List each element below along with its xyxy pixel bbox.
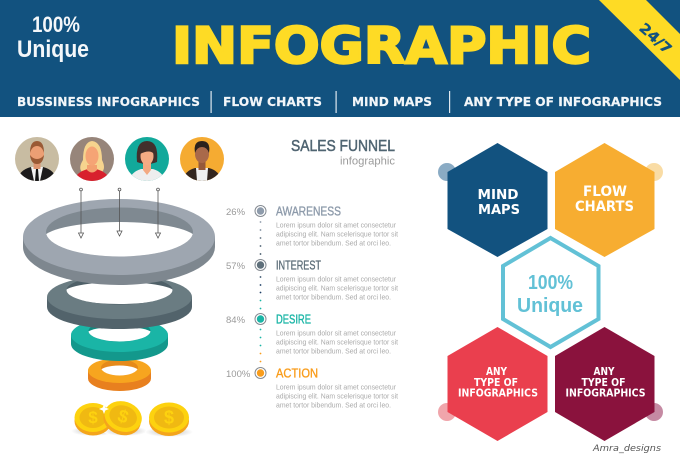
coin right: $ xyxy=(164,408,174,428)
header banner xyxy=(0,0,680,117)
hexagon: any type of infographics (maroon): INFOGRAPHICS xyxy=(566,388,646,400)
coin left: $ xyxy=(88,408,98,427)
hexagon: flow charts xyxy=(555,143,663,257)
hexagon: 100% unique: 100% xyxy=(528,272,573,294)
heading: sales funnel: infographic xyxy=(340,156,395,168)
timeline dots xyxy=(260,221,261,362)
hexagon: any type of infographics (red): INFOGRAPHICS xyxy=(458,388,538,400)
hexagon: any type of infographics (red) xyxy=(438,327,548,441)
stage: action xyxy=(226,366,398,410)
hexagon: mind maps: MAPS xyxy=(478,202,520,218)
stage: awareness: Lorem ipsum dolor sit amet consectetur xyxy=(276,220,396,230)
credit: Amra_designs xyxy=(592,444,661,454)
stage: action: ACTION xyxy=(276,366,318,380)
avatar: dark-haired woman xyxy=(125,137,169,181)
stage: desire: DESIRE xyxy=(276,312,311,326)
corner ribbon xyxy=(599,0,680,80)
hexagon: mind maps xyxy=(438,143,548,257)
hexagon: 100% unique xyxy=(503,238,598,347)
hexagon: any type of infographics (red): ANY xyxy=(486,366,507,378)
stage: desire: adipiscing elit. Nam scelerisque tortor sit xyxy=(276,338,398,346)
hexagon: 100% unique: Unique xyxy=(517,295,583,317)
heading: sales funnel xyxy=(291,138,395,168)
stage: interest: amet tortor bibendum. Sed at orci leo. xyxy=(276,292,391,302)
stage: awareness: adipiscing elit. Nam scelerisque tortor sit xyxy=(276,230,398,238)
funnel xyxy=(23,188,215,440)
stage: action: amet tortor bibendum. Sed at orci leo. xyxy=(276,400,391,410)
stage: action: adipiscing elit. Nam scelerisque tortor sit xyxy=(276,392,398,400)
hexagon: any type of infographics (red): TYPE OF xyxy=(474,377,518,389)
funnel ring 2: dark grey xyxy=(47,275,192,329)
stage: action: Lorem ipsum dolor sit amet consectetur xyxy=(276,382,396,392)
funnel ring 4: orange xyxy=(88,358,151,391)
avatar: man in jacket xyxy=(180,137,224,181)
stage: awareness: AWARENESS xyxy=(276,204,341,218)
coin middle: $ xyxy=(115,405,131,428)
corner ribbon: 24/7 xyxy=(636,20,674,58)
navigation strip: ANY TYPE OF INFOGRAPHICS xyxy=(464,94,662,109)
navigation strip: FLOW CHARTS xyxy=(223,94,322,109)
arrows into funnel xyxy=(78,188,160,238)
stage: interest: INTEREST xyxy=(276,258,321,272)
stage: desire: 84% xyxy=(226,315,246,326)
stage: desire xyxy=(226,312,398,356)
hexagon: mind maps: MIND xyxy=(478,187,518,203)
stage: awareness: 26% xyxy=(226,207,246,218)
badge: 100% Unique: Unique xyxy=(17,36,89,63)
stage: awareness xyxy=(226,204,398,248)
hexagon: flow charts: CHARTS xyxy=(575,199,634,215)
funnel ring 3: teal xyxy=(71,325,168,361)
avatar: blonde woman xyxy=(70,137,114,181)
funnel ring 1: light grey xyxy=(23,199,215,285)
navigation strip: BUSSINESS INFOGRAPHICS xyxy=(17,94,200,109)
stage: interest: 57% xyxy=(226,261,246,272)
hexagon: any type of infographics (maroon) xyxy=(555,327,663,441)
stage: interest: Lorem ipsum dolor sit amet consectetur xyxy=(276,274,396,284)
stage: interest: adipiscing elit. Nam scelerisque tortor sit xyxy=(276,284,398,292)
stage: desire: amet tortor bibendum. Sed at orci leo. xyxy=(276,346,391,356)
gold coins xyxy=(71,396,193,440)
badge: 100% Unique xyxy=(17,12,89,63)
sparkle xyxy=(99,404,109,414)
badge: 100% Unique: 100% xyxy=(32,12,80,37)
stage: action: 100% xyxy=(226,369,251,380)
navigation strip: MIND MAPS xyxy=(352,94,432,109)
stage: interest xyxy=(226,258,398,302)
avatars xyxy=(15,137,224,181)
hexagon: any type of infographics (maroon): TYPE OF xyxy=(582,377,626,389)
stage: desire: Lorem ipsum dolor sit amet consectetur xyxy=(276,328,396,338)
hexagon: any type of infographics (maroon): ANY xyxy=(594,366,615,378)
stage: awareness: amet tortor bibendum. Sed at orci leo. xyxy=(276,238,391,248)
heading: sales funnel: SALES FUNNEL xyxy=(291,138,395,155)
hexagon: flow charts: FLOW xyxy=(583,184,627,200)
avatar: man in suit xyxy=(15,137,59,181)
title: INFOGRAPHIC xyxy=(172,17,591,75)
navigation strip xyxy=(17,91,662,113)
